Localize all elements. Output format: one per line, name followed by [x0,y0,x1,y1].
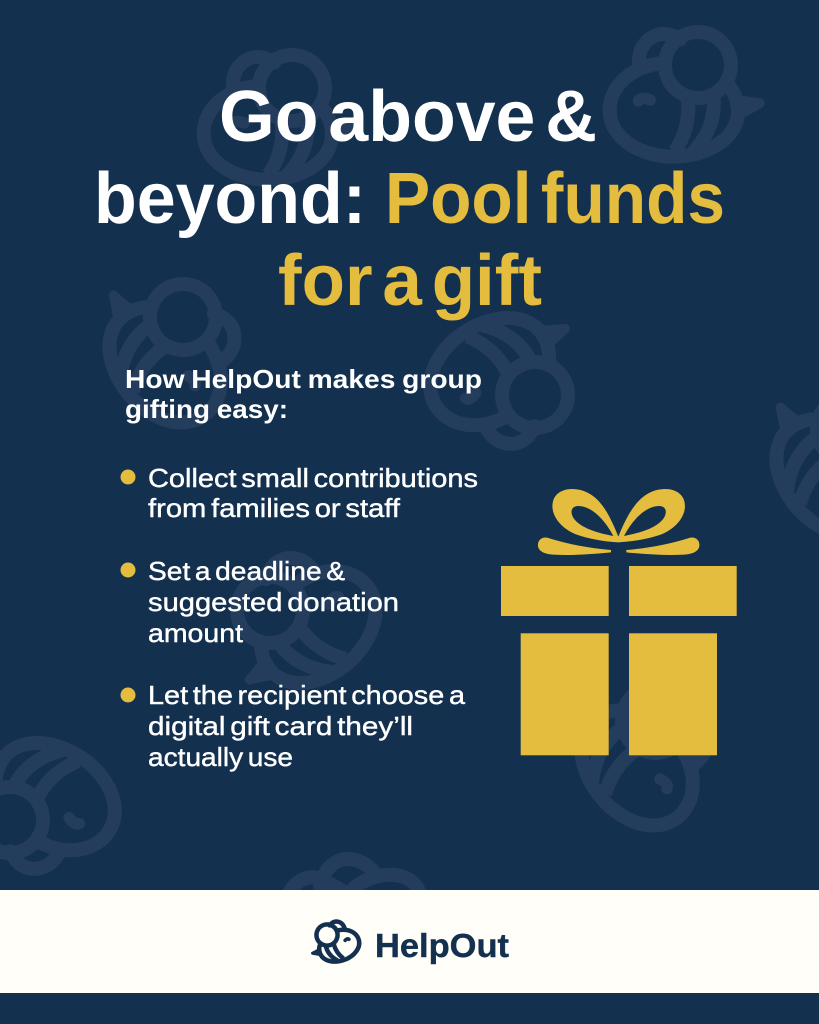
bullet 2 [120,556,399,648]
bullet 3: Let the recipient choose a [148,680,466,710]
title: beyond: [94,159,366,239]
bullet 2: suggested donation [148,587,399,617]
subheading: How HelpOut makes group [125,364,482,394]
bullet list [120,463,478,772]
title: Pool funds [385,159,725,239]
footer band [0,890,819,993]
bullet 1 [120,463,478,523]
icon: gift box [501,489,737,755]
bullet 2: amount [148,618,244,648]
bullet 1: from families or staff [148,493,401,523]
title: for a gift [278,241,542,321]
title [94,77,725,321]
title: Go above & [219,77,597,157]
bullet 3: actually use [148,742,293,772]
wordmark: HelpOut [375,927,509,964]
logo: HelpOut [304,915,509,970]
bullet 3 [120,680,466,772]
bullet 3: digital gift card they’ll [148,711,413,741]
subheading [125,364,482,424]
subheading: gifting easy: [125,394,288,424]
icon: bee logo [304,915,364,970]
bullet 2: Set a deadline & [148,556,345,586]
bullet 1: Collect small contributions [148,463,478,493]
